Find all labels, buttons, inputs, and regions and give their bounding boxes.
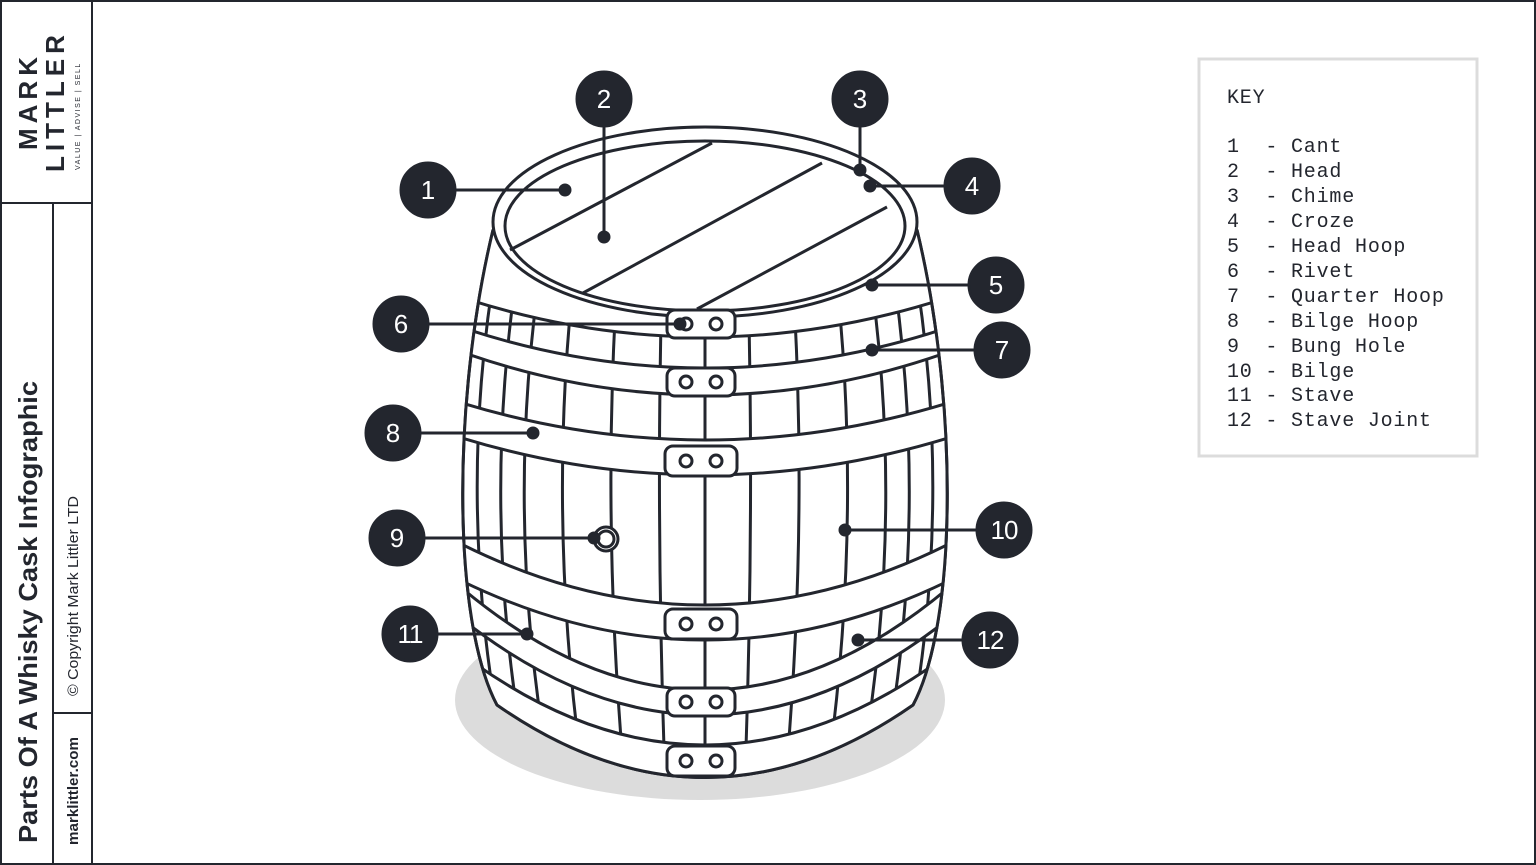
logo: LITTLER (40, 30, 70, 172)
staves (476, 307, 934, 744)
key box: 2 - Head (1227, 161, 1342, 184)
logo: MARK (13, 52, 43, 150)
callout 6 (374, 297, 685, 351)
hoop: head (480, 234, 930, 338)
hoop: lower bilge (466, 544, 944, 642)
key box: KEY (1227, 87, 1265, 110)
shadow (455, 600, 945, 800)
key box: 1 - Cant (1227, 136, 1342, 159)
key box: 9 - Bung Hole (1227, 336, 1406, 359)
callout 2: 2 (597, 84, 611, 114)
key box: 11 - Stave (1227, 385, 1355, 408)
key box: 8 - Bilge Hoop (1227, 311, 1419, 334)
logo (13, 30, 82, 172)
callout 12: 12 (977, 625, 1004, 655)
key box: 10 - Bilge (1227, 361, 1355, 384)
callout 7 (867, 323, 1029, 377)
key box (1199, 59, 1477, 456)
key box: 7 - Quarter Hoop (1227, 286, 1445, 309)
hoop: quarter (472, 330, 938, 396)
callout 3: 3 (853, 84, 867, 114)
callout 8 (366, 406, 538, 460)
barrel illustration (455, 126, 949, 800)
head planks (510, 143, 887, 309)
callout 3 (833, 72, 887, 175)
bung hole (594, 527, 618, 551)
key box: 6 - Rivet (1227, 261, 1355, 284)
callout 4: 4 (965, 171, 979, 201)
rim (493, 127, 917, 317)
key box: 4 - Croze (1227, 211, 1355, 234)
callout 9 (370, 511, 599, 565)
hoop: bottom (484, 668, 926, 774)
head (505, 141, 905, 311)
callout 11 (383, 607, 532, 661)
sidebar (0, 0, 92, 865)
callout 1: 1 (421, 175, 435, 205)
sidebar title: Parts Of A Whisky Cask Infographic (13, 381, 43, 843)
copyright: © Copyright Mark Littler LTD (65, 496, 82, 696)
callout 9: 9 (390, 523, 404, 553)
key box: 5 - Head Hoop (1227, 236, 1406, 259)
hoop: bilge (466, 403, 944, 476)
key box: 12 - Stave Joint (1227, 410, 1432, 433)
callout 11: 11 (398, 619, 423, 649)
callout 1 (401, 163, 570, 217)
callout 2 (577, 72, 631, 242)
website: marklittler.com (65, 737, 82, 845)
callout 8: 8 (386, 418, 400, 448)
callout 12 (853, 613, 1017, 667)
key box: 3 - Chime (1227, 186, 1355, 209)
barrel outline (463, 230, 947, 778)
callout 7: 7 (995, 335, 1009, 365)
logo: VALUE | ADVISE | SELL (75, 62, 82, 170)
callout 10: 10 (991, 515, 1018, 545)
callout 6: 6 (394, 309, 408, 339)
callout 4 (865, 159, 999, 213)
callout 10 (840, 503, 1031, 557)
rivet plates (665, 310, 737, 776)
callout 5 (867, 258, 1023, 312)
hoop: lower quarter (470, 592, 940, 716)
callout 5: 5 (989, 270, 1003, 300)
barrel body (463, 230, 947, 778)
callouts (366, 72, 1031, 667)
